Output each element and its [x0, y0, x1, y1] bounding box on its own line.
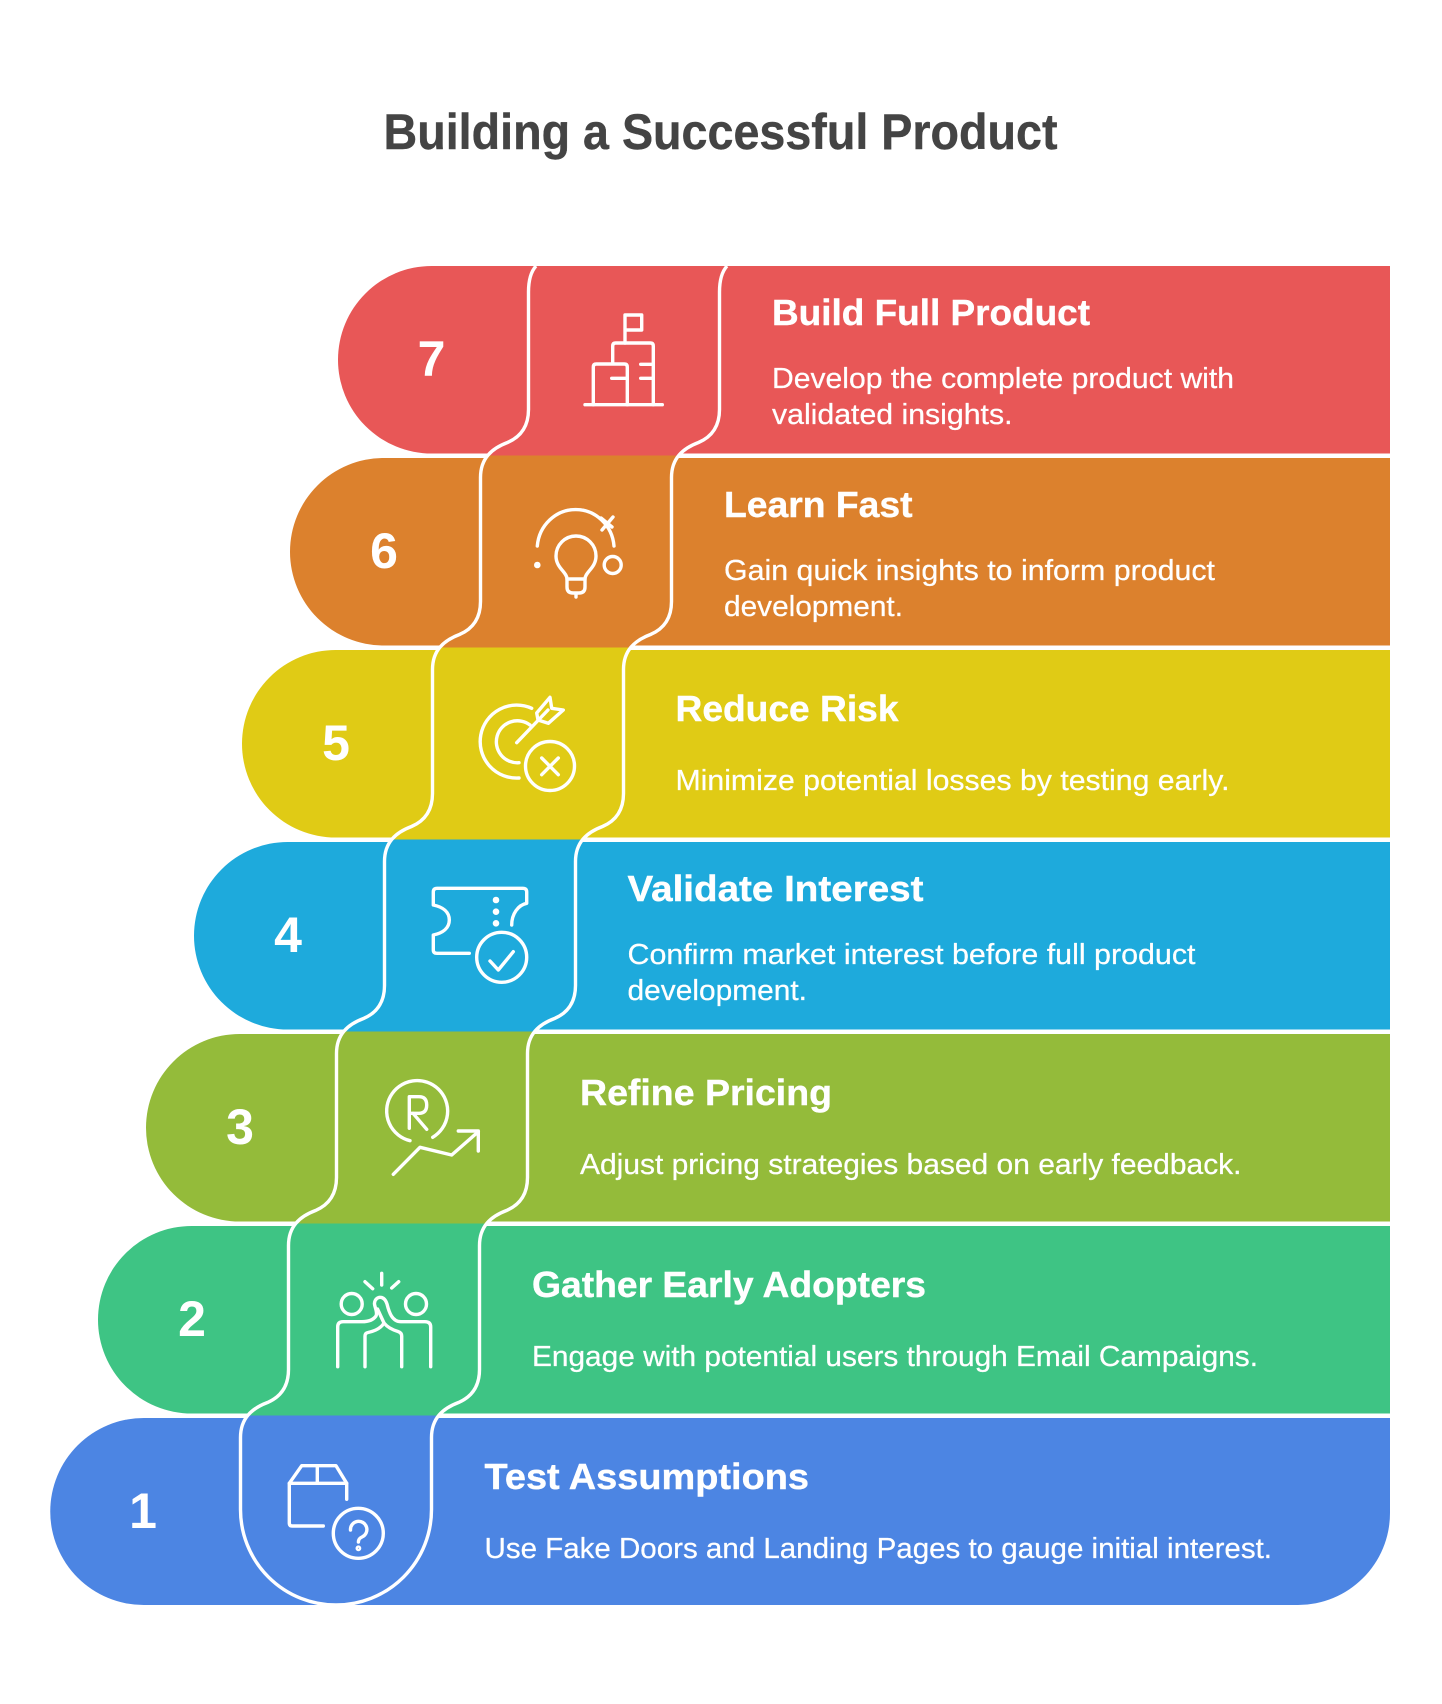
- heading 2: Gather Early Adopters: [532, 1264, 926, 1305]
- number 2: 2: [178, 1291, 206, 1347]
- panel: step 5 reduce risk: [242, 648, 1390, 840]
- icon: target with arrow and cross: [480, 697, 574, 790]
- number 7: 7: [418, 331, 445, 387]
- band shape 7: [338, 266, 1390, 454]
- panel: step 2 gather early adopters: [98, 1224, 1390, 1416]
- panel: step 6 learn fast: [290, 456, 1390, 648]
- description 4: Confirm market interest before full product: [628, 939, 1196, 971]
- icon: buildings with flag: [585, 315, 662, 405]
- description 7: Develop the complete product with: [772, 363, 1234, 395]
- description 6: development.: [724, 591, 903, 623]
- band shape 6: [290, 458, 1390, 646]
- panel: step 3 refine pricing: [146, 1032, 1390, 1224]
- number 6: 6: [370, 523, 398, 579]
- heading 1: Test Assumptions: [484, 1456, 809, 1497]
- panel: step 7 build full product: [338, 266, 1390, 456]
- heading 6: Learn Fast: [724, 484, 913, 525]
- panel: step 1 test assumptions: [0, 1416, 1442, 1605]
- heading 3: Refine Pricing: [580, 1072, 832, 1113]
- band shape 2: [98, 1226, 1390, 1414]
- description 5: Minimize potential losses by testing early.: [676, 765, 1230, 797]
- panel: step 4 validate interest: [194, 840, 1390, 1032]
- description 4: development.: [628, 975, 807, 1007]
- winding white divider lines: [240, 266, 727, 1605]
- number 4: 4: [274, 907, 302, 963]
- number 3: 3: [226, 1099, 254, 1155]
- heading 4: Validate Interest: [628, 868, 924, 909]
- band shape 3: [146, 1034, 1390, 1222]
- band shape 5: [242, 650, 1390, 838]
- band shape 4: [194, 842, 1390, 1030]
- icon: two people high five: [338, 1273, 431, 1367]
- heading 5: Reduce Risk: [676, 688, 900, 729]
- band shape 1: [50, 1418, 1390, 1605]
- number 5: 5: [322, 715, 350, 771]
- number 1: 1: [129, 1483, 157, 1539]
- description 4: [628, 939, 1196, 1007]
- description 2: Engage with potential users through Email Campaigns.: [532, 1341, 1258, 1373]
- description 3: Adjust pricing strategies based on early feedback.: [580, 1149, 1242, 1181]
- icon: price symbol with rising arrow: [387, 1081, 478, 1174]
- description 7: [772, 363, 1234, 431]
- description 7: validated insights.: [772, 399, 1012, 431]
- description 6: Gain quick insights to inform product: [724, 555, 1215, 587]
- icon: ticket with check: [433, 888, 527, 982]
- heading 7: Build Full Product: [772, 292, 1090, 333]
- title: Building a Successful Product: [384, 104, 1058, 160]
- icon: light bulb with orbit: [536, 510, 621, 597]
- icon: box with question mark: [289, 1466, 383, 1558]
- description 1: Use Fake Doors and Landing Pages to gauge initial interest.: [484, 1533, 1272, 1565]
- description 6: [724, 555, 1215, 623]
